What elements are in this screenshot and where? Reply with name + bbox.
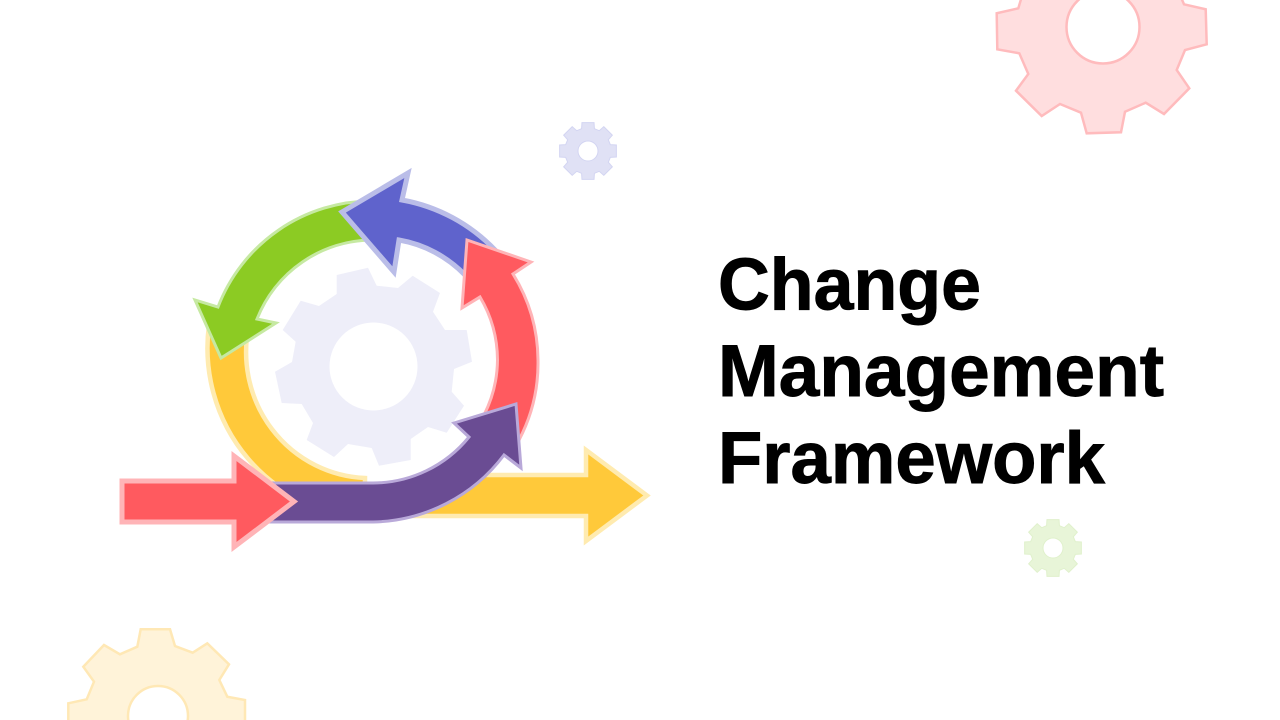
- arrow: blue curved arrow: [342, 173, 495, 275]
- title: [718, 244, 1164, 499]
- icon: large yellow gear, bottom left: [68, 629, 245, 720]
- arrow: green curved arrow: [195, 201, 372, 358]
- arrow: purple curved arrow: [268, 404, 521, 522]
- icon: large red gear, top right: [997, 0, 1207, 133]
- title line: Management: Management: [718, 331, 1164, 412]
- icon: small purple gear: [560, 123, 616, 179]
- icon: small green gear: [1025, 520, 1081, 576]
- arrow: red straight entry arrow: [122, 456, 294, 547]
- arrow: red curved arrow: [462, 240, 538, 440]
- arrow: yellow ring sweeping into straight arrow: [207, 325, 647, 541]
- title line: Framework: Framework: [718, 418, 1105, 499]
- icon: central pale gear: [275, 268, 472, 466]
- title line: Change: Change: [718, 244, 981, 326]
